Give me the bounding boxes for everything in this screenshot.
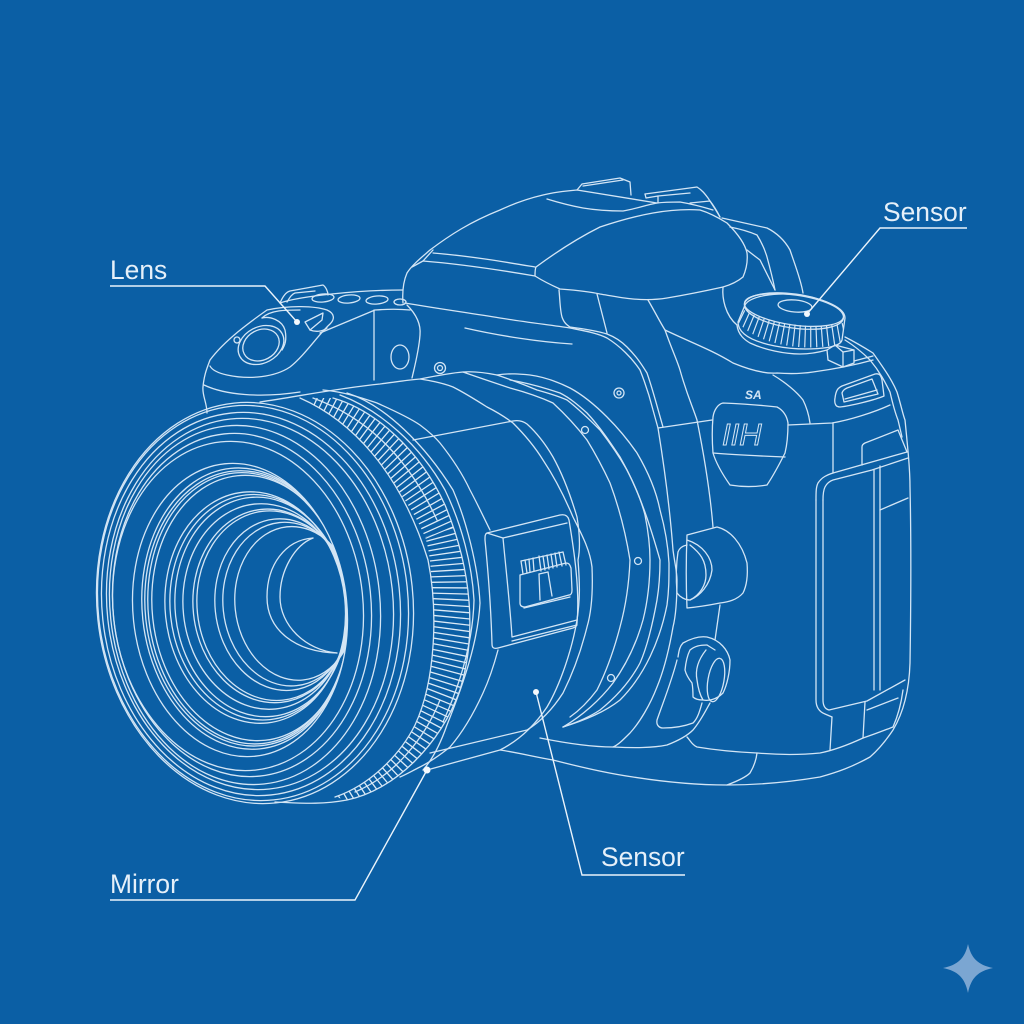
lower control knob bbox=[657, 637, 730, 728]
badge with logo: IIH bbox=[722, 417, 762, 452]
hot shoe bbox=[577, 178, 720, 217]
viewfinder window bbox=[835, 374, 884, 407]
callout: Sensor top right: Sensor bbox=[883, 197, 967, 227]
callout: Lens bbox=[110, 255, 300, 325]
callout: Lens: Lens bbox=[110, 255, 167, 285]
callout: Sensor bottom: Sensor bbox=[601, 842, 685, 872]
callout: Sensor top right bbox=[804, 197, 967, 317]
callout: Mirror bbox=[110, 766, 430, 900]
upper control knob bbox=[676, 527, 747, 640]
badge with logo bbox=[712, 388, 788, 486]
callout: Sensor bottom bbox=[533, 689, 685, 875]
side button by dial bbox=[827, 345, 873, 367]
lens switch panel bbox=[485, 515, 578, 648]
badge with logo: SA bbox=[745, 388, 762, 402]
lens inner elements bbox=[141, 467, 347, 750]
icon: four-point star bbox=[943, 944, 993, 993]
callout: Mirror: Mirror bbox=[110, 869, 179, 899]
lens front rings bbox=[77, 387, 433, 819]
lens aperture crescent bbox=[267, 538, 337, 653]
hand grip bbox=[500, 337, 911, 785]
camera body: left shoulder bbox=[203, 285, 446, 413]
camera illustration bbox=[77, 178, 911, 819]
pentaprism housing bbox=[403, 190, 747, 344]
lens barrel bbox=[260, 372, 669, 777]
sensor dial bbox=[735, 287, 848, 354]
strap lug bbox=[722, 218, 803, 293]
camera body: front panel bbox=[405, 287, 890, 747]
focus ring with knurling bbox=[275, 398, 470, 803]
